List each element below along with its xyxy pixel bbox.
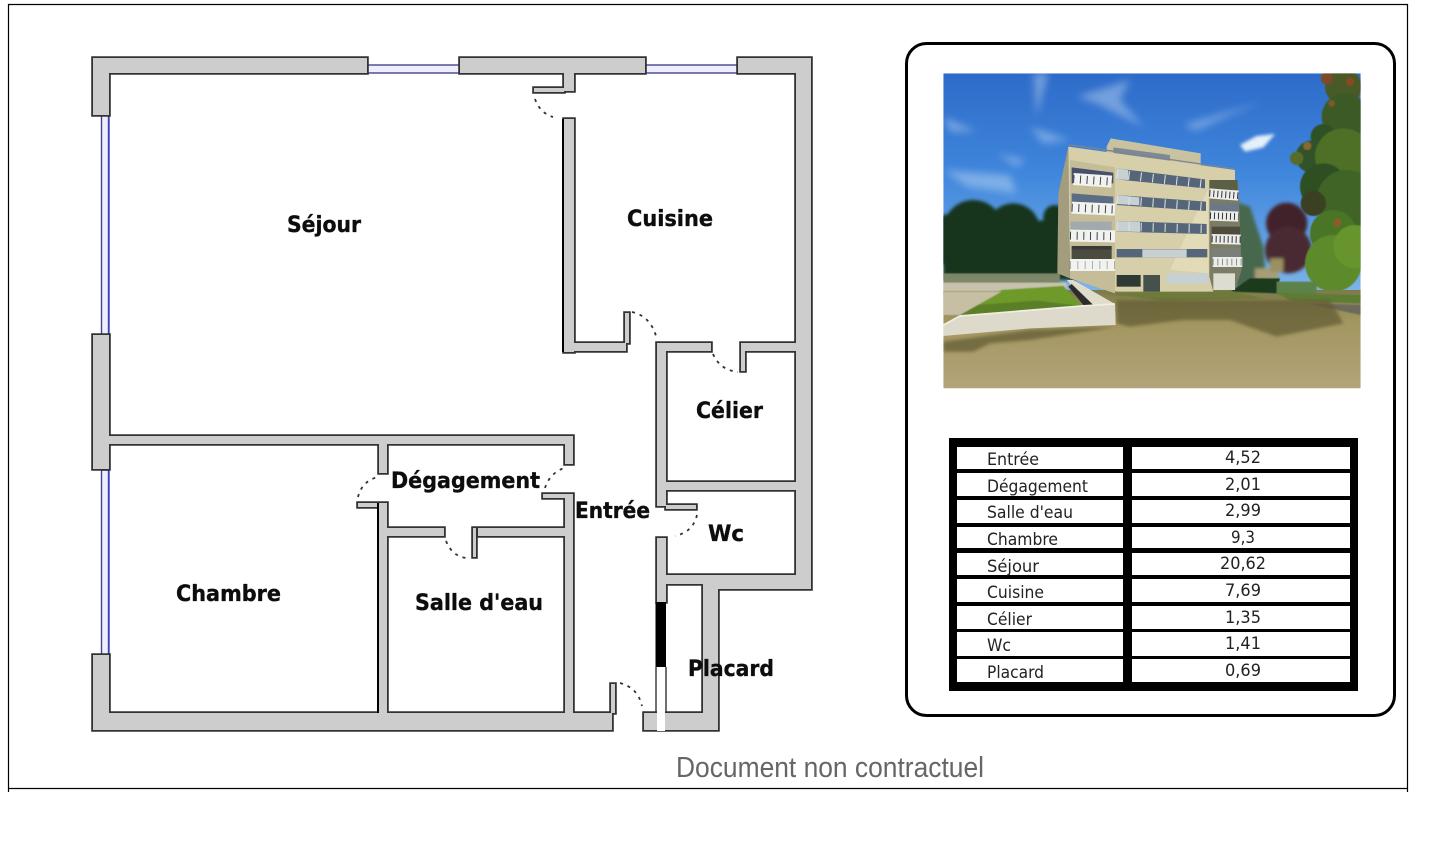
- planter wall: [943, 304, 1116, 336]
- main facade: [1068, 147, 1235, 292]
- row: Placard: 0,69: [1225, 661, 1261, 681]
- row: Célier: Célier: [987, 610, 1032, 630]
- row: Wc: 1,41: [1225, 634, 1261, 654]
- label: Wc: Wc: [708, 522, 744, 547]
- row: Salle d'eau: [987, 501, 1261, 523]
- building photo: [927, 68, 1377, 388]
- ground: [943, 290, 1361, 388]
- row: Chambre: [987, 528, 1255, 550]
- row: Célier: 1,35: [1225, 608, 1261, 628]
- facade shadow: [1070, 160, 1115, 293]
- floor plan: [93, 58, 811, 731]
- label: Placard: Placard: [688, 657, 774, 682]
- row: Séjour: [987, 554, 1266, 577]
- heavy wall edges: [378, 119, 563, 713]
- table frame: [949, 438, 1358, 691]
- row: Entrée: [987, 448, 1261, 470]
- row: Dégagement: [987, 475, 1261, 497]
- lawn: [958, 286, 1082, 316]
- info panel: [906, 44, 1394, 716]
- label: Entrée: Entrée: [575, 499, 650, 524]
- row: Dégagement: Dégagement: [987, 477, 1088, 497]
- small cloud: [1240, 134, 1275, 152]
- right balconies: [1209, 180, 1242, 290]
- label: Séjour: Séjour: [287, 213, 361, 238]
- row: Entrée: Entrée: [987, 450, 1039, 470]
- row: Chambre: 9,3: [1231, 528, 1255, 548]
- surface table: [949, 438, 1358, 691]
- walls: [93, 58, 811, 730]
- row: Placard: Placard: [987, 663, 1044, 683]
- ramp: [1067, 280, 1115, 306]
- row: Chambre: Chambre: [987, 530, 1058, 550]
- label: Célier: Célier: [696, 399, 763, 424]
- row: Salle d'eau: 2,99: [1225, 501, 1261, 521]
- right balcony backing: [1208, 183, 1242, 290]
- building left side: [1057, 147, 1070, 278]
- right foreground tree: [1289, 73, 1361, 290]
- row: Wc: [987, 634, 1261, 656]
- roof railing: [1069, 145, 1235, 169]
- window highlights: [1117, 168, 1208, 283]
- row: Wc: Wc: [987, 636, 1011, 656]
- row: Salle d'eau: Salle d'eau: [987, 503, 1073, 523]
- path: [943, 292, 1002, 315]
- row: Placard: [987, 661, 1261, 683]
- row: Cuisine: 7,69: [1225, 581, 1261, 601]
- row: Entrée: 4,52: [1225, 448, 1261, 468]
- window inner blue lines: [108, 115, 110, 655]
- row: Célier: [987, 608, 1261, 630]
- door swing arcs: [358, 99, 738, 706]
- row: Dégagement: 2,01: [1225, 475, 1261, 495]
- row: Séjour: 20,62: [1220, 554, 1266, 574]
- room labels: [176, 207, 774, 682]
- penthouse: [1106, 138, 1201, 166]
- row: Cuisine: Cuisine: [987, 583, 1044, 603]
- footer note: Document non contractuel: [676, 752, 984, 784]
- background hedge and garden: [943, 273, 1361, 315]
- entry closet strip: [656, 602, 666, 731]
- left trees: [927, 200, 1077, 280]
- row: Séjour: Séjour: [987, 557, 1039, 577]
- row: Cuisine: [987, 581, 1261, 603]
- window mullions: [1117, 174, 1207, 229]
- label: Chambre: Chambre: [176, 582, 281, 607]
- clouds: [943, 73, 1263, 193]
- cell backgrounds: [957, 447, 1350, 682]
- label: Salle d'eau: Salle d'eau: [415, 591, 543, 616]
- right background trees: [1236, 200, 1312, 288]
- ground shadows: [943, 300, 1343, 352]
- label: Cuisine: Cuisine: [627, 207, 713, 232]
- left balconies: [1070, 167, 1115, 265]
- label: Dégagement: Dégagement: [391, 469, 540, 494]
- sky: [943, 73, 1361, 297]
- windows: [102, 65, 738, 655]
- window rows: [1117, 168, 1207, 292]
